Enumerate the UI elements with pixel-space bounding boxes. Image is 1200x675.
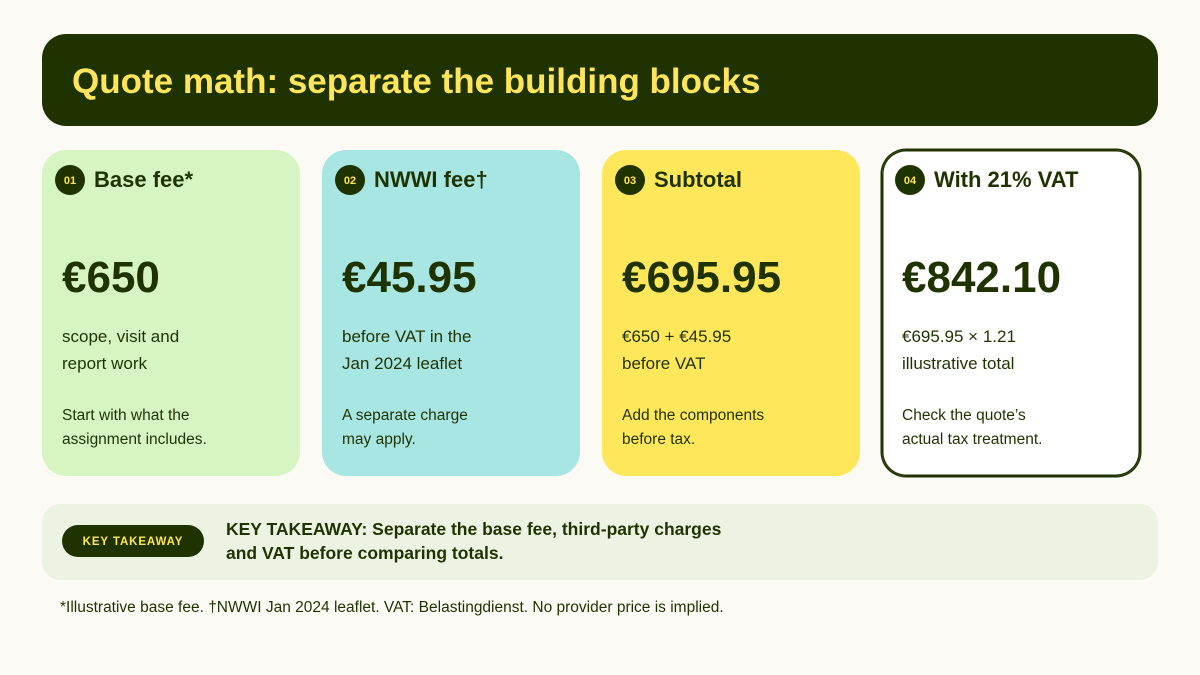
badge: 01: 01 xyxy=(64,175,76,187)
badge: 02: 02 xyxy=(344,175,356,187)
value: subtotal amount: €695.95 xyxy=(622,253,781,302)
key takeaway text xyxy=(226,519,721,563)
value: base fee amount: €650 xyxy=(62,253,160,302)
note: subtotal xyxy=(622,407,764,448)
description: NWWI fee xyxy=(342,327,471,373)
note: base fee: assignment includes. xyxy=(62,431,207,448)
note: subtotal: before tax. xyxy=(622,431,695,448)
description: base fee: report work xyxy=(62,354,147,373)
badge: 03: 03 xyxy=(624,175,636,187)
title: Quote math: separate the building blocks xyxy=(72,62,760,101)
description: NWWI fee: before VAT in the xyxy=(342,327,471,346)
note: total: Check the quote’s xyxy=(902,407,1026,424)
panel: key takeaway xyxy=(42,504,1158,580)
note: total: actual tax treatment. xyxy=(902,431,1042,448)
title banner xyxy=(42,34,1158,126)
description: total: illustrative total xyxy=(902,354,1014,373)
key takeaway pill xyxy=(62,525,204,557)
footnote: *Illustrative base fee. †NWWI Jan 2024 leaflet. VAT: Belastingdienst. No provider price is implied. xyxy=(60,599,724,616)
key takeaway text: KEY TAKEAWAY: Separate the base fee, third-party charges xyxy=(226,519,721,539)
note: NWWI fee xyxy=(342,407,468,448)
heading: with 21% VAT: With 21% VAT xyxy=(934,167,1078,192)
description: subtotal: €650 + €45.95 xyxy=(622,327,731,346)
note: base fee xyxy=(62,407,207,448)
badge: 03 xyxy=(615,165,645,195)
key takeaway pill: KEY TAKEAWAY xyxy=(83,536,183,548)
panel: with 21% VAT xyxy=(882,150,1140,476)
heading: base fee: Base fee* xyxy=(94,167,193,192)
description: total xyxy=(902,327,1016,373)
badge: 02 xyxy=(335,165,365,195)
panel: subtotal xyxy=(602,150,860,476)
panel: base fee xyxy=(42,150,300,476)
panel: NWWI fee xyxy=(322,150,580,476)
badge: 04 xyxy=(895,165,925,195)
note: total xyxy=(902,407,1042,448)
value: NWWI fee amount: €45.95 xyxy=(342,253,477,302)
description: subtotal xyxy=(622,327,731,373)
heading: NWWI fee: NWWI fee† xyxy=(374,167,488,192)
badge: 04: 04 xyxy=(904,175,916,187)
key takeaway text: and VAT before comparing totals. xyxy=(226,543,503,563)
description: base fee xyxy=(62,327,179,373)
badge: 01 xyxy=(55,165,85,195)
description: total: €695.95 × 1.21 xyxy=(902,327,1016,346)
note: base fee: Start with what the xyxy=(62,407,190,424)
description: subtotal: before VAT xyxy=(622,354,705,373)
note: NWWI fee: A separate charge xyxy=(342,407,468,424)
value: total amount: €842.10 xyxy=(902,253,1061,302)
description: NWWI fee: Jan 2024 leaflet xyxy=(342,354,462,373)
heading: subtotal: Subtotal xyxy=(654,167,742,192)
note: NWWI fee: may apply. xyxy=(342,431,416,448)
note: subtotal: Add the components xyxy=(622,407,764,424)
description: base fee: scope, visit and xyxy=(62,327,179,346)
